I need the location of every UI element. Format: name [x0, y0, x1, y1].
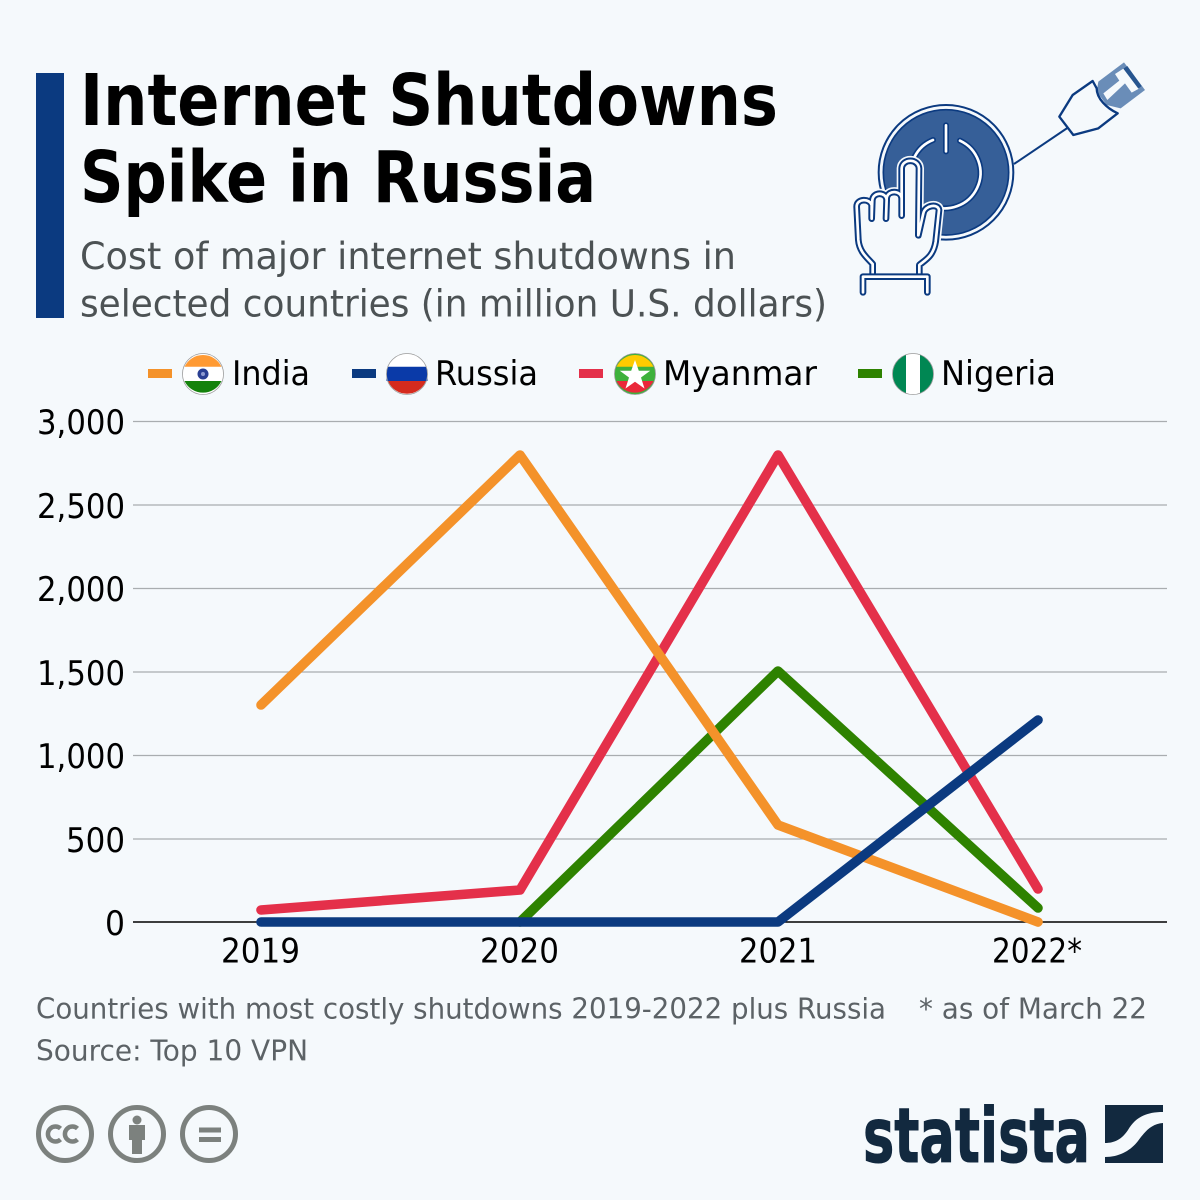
icon: power button — [879, 105, 1013, 240]
legend item: Russia — [352, 354, 538, 394]
legend item: Myanmar: Myanmar — [663, 354, 817, 393]
subtitle: selected countries (in million U.S. dollars) — [80, 282, 827, 326]
icon: network plug — [1059, 62, 1145, 135]
y axis labels: 500 — [66, 821, 125, 860]
series: Nigeria — [520, 671, 1038, 922]
x axis labels: 2019 — [221, 932, 300, 970]
y axis labels — [37, 403, 125, 943]
wordmark: statista — [863, 1091, 1090, 1180]
x axis labels: 2022* — [992, 932, 1082, 970]
x axis labels: 2020 — [480, 932, 559, 970]
y axis labels: 1,000 — [37, 737, 125, 776]
icon: hand — [857, 161, 939, 292]
series: India — [261, 455, 1038, 922]
title: Internet Shutdowns — [80, 59, 778, 142]
legend item: India: India — [232, 354, 310, 393]
subtitle: Cost of major internet shutdowns in — [80, 235, 736, 278]
logo mark — [1105, 1105, 1163, 1163]
y axis labels: 3,000 — [37, 403, 125, 442]
title — [80, 59, 778, 219]
icon: attribution — [110, 1108, 164, 1160]
legend item: Myanmar — [579, 354, 817, 394]
series lines — [261, 455, 1038, 922]
title: Spike in Russia — [80, 136, 596, 219]
icon: no derivatives — [182, 1108, 236, 1160]
line chart — [37, 403, 1167, 970]
x axis labels — [221, 932, 1082, 970]
subtitle — [80, 235, 827, 326]
legend — [148, 354, 1056, 394]
y axis labels: 0 — [105, 904, 125, 943]
series: Russia — [261, 720, 1038, 922]
legend item: Russia: Russia — [435, 354, 538, 393]
footnotes: Countries with most costly shutdowns 2019-2022 plus Russia — [36, 992, 886, 1026]
license icons — [38, 1108, 236, 1160]
title accent bar — [36, 73, 64, 318]
icon: hand pressing power button with unplugged cable — [857, 62, 1145, 292]
footnotes: * as of March 22 — [919, 992, 1147, 1026]
icon: CC — [38, 1108, 92, 1160]
x axis labels: 2021 — [739, 932, 817, 970]
y axis labels: 2,000 — [37, 570, 125, 609]
statista logo — [863, 1091, 1163, 1180]
legend item: Nigeria — [858, 354, 1056, 394]
footnotes — [36, 992, 1147, 1068]
series: Myanmar — [261, 455, 1038, 910]
y axis labels: 1,500 — [37, 654, 125, 693]
legend item: Nigeria: Nigeria — [941, 354, 1056, 393]
y axis labels: 2,500 — [37, 487, 125, 526]
footnotes: Source: Top 10 VPN — [36, 1034, 308, 1068]
legend item: India — [148, 354, 310, 394]
icon: cable — [1014, 128, 1067, 164]
